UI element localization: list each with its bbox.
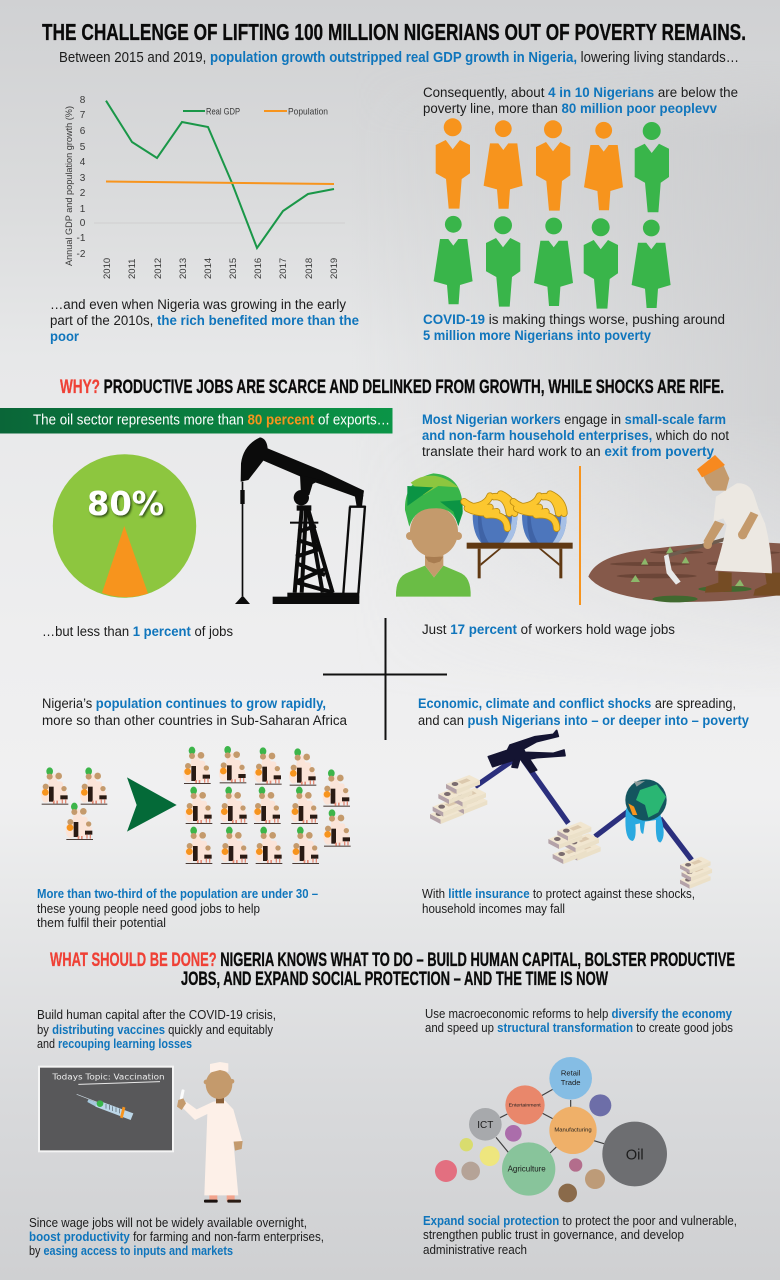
y axis values: 0 (80, 218, 86, 229)
text: macroeconomic reforms: and speed up structural transformation to create good jobs (425, 1021, 733, 1035)
cross divider (323, 618, 447, 740)
text: young population: More than two-third of the population are under 30 – (37, 887, 318, 901)
illustration: market seller with bananas (396, 473, 573, 597)
field (588, 542, 780, 602)
text: population growth (42, 696, 347, 728)
bubble labels: Manufacturing (554, 1128, 592, 1134)
text: the rich benefited: poor (50, 329, 80, 344)
text: small-scale enterprises: translate their hard work to an exit from poverty (422, 444, 714, 459)
text: COVID-19: COVID-19 is making things worse, pushing around (423, 312, 725, 327)
line chart: real GDP and population growth (64, 95, 345, 279)
seller (396, 473, 471, 597)
x axis years: 2013 (178, 258, 189, 279)
text: young population: these young people need good jobs to help (37, 902, 260, 916)
bubble labels: Retail (561, 1069, 581, 1078)
x axis years: 2017 (278, 258, 289, 279)
illustration: income shocks (430, 730, 712, 889)
connectors (496, 1089, 604, 1153)
bubble labels: Trade (561, 1078, 581, 1087)
heading: what should be done (50, 950, 735, 990)
y axis values: 8 (80, 95, 86, 106)
text: social protection: strengthen public trust in governance, and develop (423, 1228, 684, 1242)
text: boost productivity (29, 1216, 324, 1258)
text: shocks (418, 696, 749, 728)
y axis values: -2 (77, 249, 86, 260)
intro text: Between 2015 and 2019, population growth outstripped real GDP growth in Nigeria, lowering living standards… (59, 49, 739, 66)
text: the rich benefited: part of the 2010s, the rich benefited more than the (50, 313, 359, 328)
banner: oil exports: The oil sector represents more than 80 percent of exports… (33, 412, 390, 428)
text: macroeconomic reforms (425, 1007, 733, 1035)
x axis years: 2019 (329, 258, 340, 279)
text: 4 in 10 Nigerians: Consequently, about 4 in 10 Nigerians are below the (423, 85, 738, 100)
y axis values: 6 (80, 126, 86, 137)
legend: Real GDP (206, 106, 240, 116)
y axis values: 4 (80, 157, 86, 168)
arms (703, 521, 724, 544)
x axis years: 2012 (153, 258, 164, 279)
text: little insurance (422, 887, 695, 916)
text: the rich benefited: …and even when Nigeria was growing in the early (50, 297, 346, 312)
text: small-scale enterprises: Most Nigerian workers engage in small-scale farm (422, 412, 726, 427)
y axis values: -1 (77, 233, 86, 244)
illustration: blackboard with syringe: Todays Topic: Vaccination (51, 1071, 165, 1081)
text: social protection: Expand social protection to protect the poor and vulnerable, (423, 1214, 737, 1228)
y axis values: 2 (80, 188, 86, 199)
text: population growth: more so than other countries in Sub-Saharan Africa (42, 713, 347, 728)
text: young population: them fulfil their potential (37, 916, 166, 930)
text: human capital (37, 1008, 276, 1051)
income path (475, 760, 692, 860)
pie chart: 80 percent (53, 454, 196, 598)
text: shocks: and can push Nigerians into – or deeper into – poverty (418, 713, 749, 728)
bubble chart: sectors of the economy (435, 1057, 667, 1202)
text: shocks: Economic, climate and conflict shocks are spreading, (418, 696, 736, 711)
bubble labels: Entertainment (509, 1102, 542, 1107)
banner: oil exports (0, 408, 392, 434)
head (703, 463, 729, 491)
robe (713, 483, 772, 573)
x axis years: 2015 (228, 258, 239, 279)
x axis years: 2016 (253, 258, 264, 279)
three families (41, 767, 107, 840)
text: boost productivity: boost productivity for farming and non-farm enterprises, (29, 1230, 324, 1244)
text: 4 in 10 Nigerians (423, 85, 738, 116)
text: macroeconomic reforms: Use macroeconomic reforms to help diversify the economy (425, 1007, 732, 1021)
divider: orange vertical line (579, 466, 581, 605)
text: human capital: Build human capital after the COVID-19 crisis, (37, 1008, 276, 1022)
x axis years: 2018 (304, 258, 315, 279)
x axis years: 2010 (102, 258, 113, 279)
pictogram: 4 of 10 people in poverty (434, 118, 671, 309)
text: population growth: Nigeria’s population continues to grow rapidly, (42, 696, 326, 711)
text: human capital: and recouping learning losses (37, 1037, 192, 1051)
boots (705, 572, 732, 593)
text: less than 1 percent: …but less than 1 percent of jobs (42, 624, 233, 639)
x axis years: 2011 (127, 259, 138, 279)
text: boost productivity: Since wage jobs will not be widely available overnight, (29, 1216, 307, 1230)
y axis values: 1 (80, 204, 86, 215)
icon group: families growing (41, 746, 351, 864)
illustration: blackboard with syringe (39, 1067, 173, 1151)
text: young population (37, 887, 318, 930)
illustration: farmer hoeing a field (588, 455, 780, 602)
y axis values: 3 (80, 173, 86, 184)
x axis years: 2014 (203, 258, 214, 279)
pie chart: 80 percent: 80% (87, 484, 164, 523)
population line (106, 182, 334, 184)
bananas and bowls (464, 494, 567, 544)
text: small-scale enterprises: and non-farm household enterprises, which do not (422, 428, 729, 443)
many families (183, 746, 351, 864)
icon: oil pump (235, 437, 366, 604)
illustration: teacher (177, 1062, 243, 1203)
bubbles (435, 1057, 667, 1202)
text: 17 percent: Just 17 percent of workers hold wage jobs (422, 622, 675, 637)
y axis values: 7 (80, 110, 86, 121)
y axis title: Annual GDP and population growth (%) (64, 106, 75, 266)
text: little insurance: With little insurance to protect against these shocks, (422, 887, 695, 901)
text: social protection: administrative reach (423, 1243, 527, 1257)
bubble labels: Agriculture (508, 1164, 546, 1173)
text: the rich benefited (50, 297, 359, 344)
x axis years (102, 258, 340, 279)
legend (183, 106, 328, 116)
y axis values: 5 (80, 142, 86, 153)
bubble labels: Oil (626, 1147, 644, 1163)
text: 4 in 10 Nigerians: poverty line, more than 80 million poor peoplevv (423, 101, 717, 116)
bubble labels (477, 1069, 644, 1173)
text: COVID-19: 5 million more Nigerians into poverty (423, 328, 651, 343)
arrow (127, 777, 177, 832)
real GDP line (106, 101, 334, 248)
gun (488, 730, 565, 772)
hoe (667, 529, 755, 557)
table (467, 543, 573, 578)
money stacks (430, 775, 712, 889)
text: small-scale enterprises (422, 412, 729, 459)
text: little insurance: household incomes may fall (422, 902, 565, 916)
text: social protection (423, 1214, 737, 1257)
legend: Population (288, 106, 328, 116)
text: COVID-19 (423, 312, 725, 343)
bubble labels: ICT (477, 1120, 493, 1131)
syringe (77, 1094, 133, 1120)
globe (625, 779, 667, 842)
text: boost productivity: by easing access to inputs and markets (29, 1244, 233, 1258)
text: human capital: by distributing vaccines quickly and equitably (37, 1023, 274, 1037)
y axis values (77, 95, 86, 260)
